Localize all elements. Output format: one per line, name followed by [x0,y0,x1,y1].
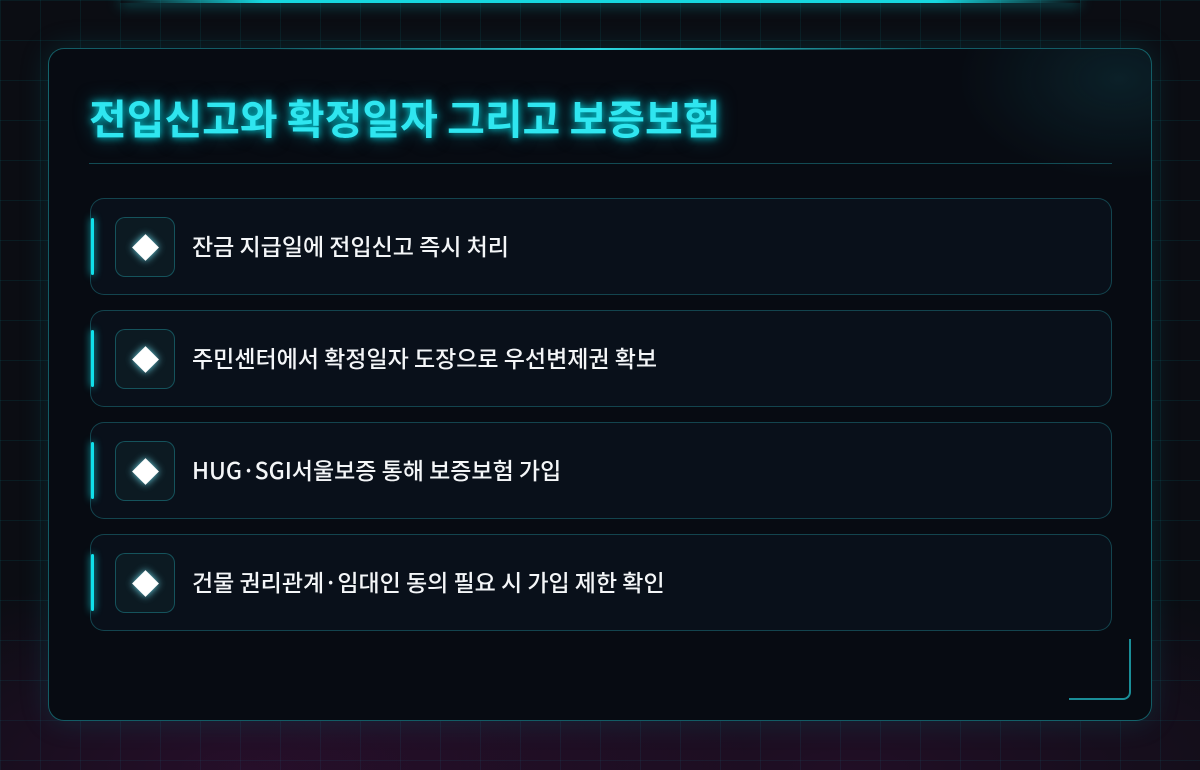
item 1 [90,198,1112,295]
item 1: 잔금 지급일에 전입신고 즉시 처리 [192,228,509,262]
item 4 [90,534,1112,631]
item 3: HUG·SGI서울보증 통해 보증보험 가입 [192,452,561,486]
item 2 [90,310,1112,407]
corner bracket [1069,639,1131,700]
item 3 [90,422,1112,519]
item 4: 건물 권리관계·임대인 동의 필요 시 가입 제한 확인 [192,564,665,598]
item 2: 주민센터에서 확정일자 도장으로 우선변제권 확보 [192,340,657,374]
title: 전입신고와 확정일자 그리고 보증보험 [89,86,720,146]
